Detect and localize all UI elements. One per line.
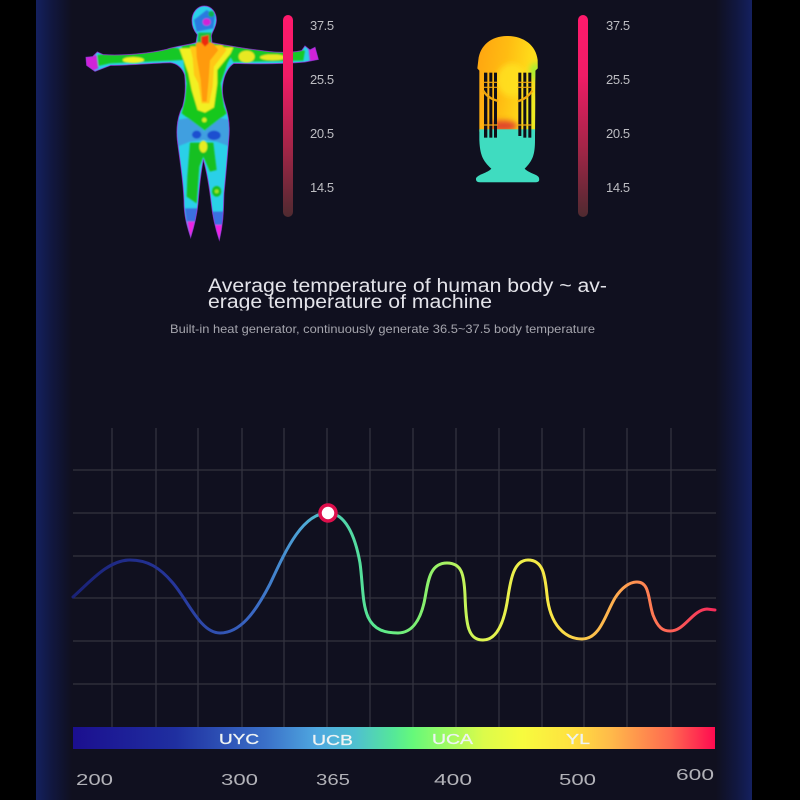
- peak marker at 365: [320, 505, 336, 521]
- wavelength axis labels: 500: [559, 772, 596, 789]
- spectrum band: [73, 727, 715, 749]
- temperature labels: machine: [606, 18, 630, 195]
- temperature labels: body: 25.5: [310, 72, 334, 87]
- heading: [208, 278, 606, 310]
- temperature labels: machine: 25.5: [606, 72, 630, 87]
- wavelength axis labels: 400: [434, 772, 472, 789]
- thermal image: human body: [86, 6, 319, 242]
- temperature labels: body: [310, 18, 334, 195]
- temperature labels: machine: 14.5: [606, 180, 630, 195]
- band labels: [219, 731, 590, 749]
- wavelength axis labels: [76, 767, 714, 789]
- wavelength axis labels: 200: [76, 772, 113, 789]
- temperature labels: body: 20.5: [310, 126, 334, 141]
- temperature labels: body: 37.5: [310, 18, 334, 33]
- wavelength axis labels: 300: [221, 772, 258, 789]
- chart grid: [73, 428, 716, 727]
- wavelength axis labels: 600: [676, 767, 714, 784]
- temperature labels: machine: 20.5: [606, 126, 630, 141]
- temperature scale bar: body: [283, 15, 293, 217]
- band labels: UYC: [219, 731, 259, 748]
- temperature labels: machine: 37.5: [606, 18, 630, 33]
- sub-heading: Built-in heat generator, continuously generate 36.5~37.5 body temperature: [170, 322, 595, 336]
- band labels: UCB: [312, 732, 353, 749]
- band labels: YL: [566, 731, 590, 748]
- thermal image: machine: [476, 36, 540, 182]
- band labels: UCA: [432, 731, 473, 748]
- heading: erage temperature of machine: [208, 291, 492, 313]
- wavelength axis labels: 365: [316, 772, 350, 789]
- temperature scale bar: machine: [578, 15, 588, 217]
- heading: Average temperature of human body ~ av-: [208, 275, 607, 297]
- temperature labels: body: 14.5: [310, 180, 334, 195]
- spectrum curve: [73, 513, 715, 640]
